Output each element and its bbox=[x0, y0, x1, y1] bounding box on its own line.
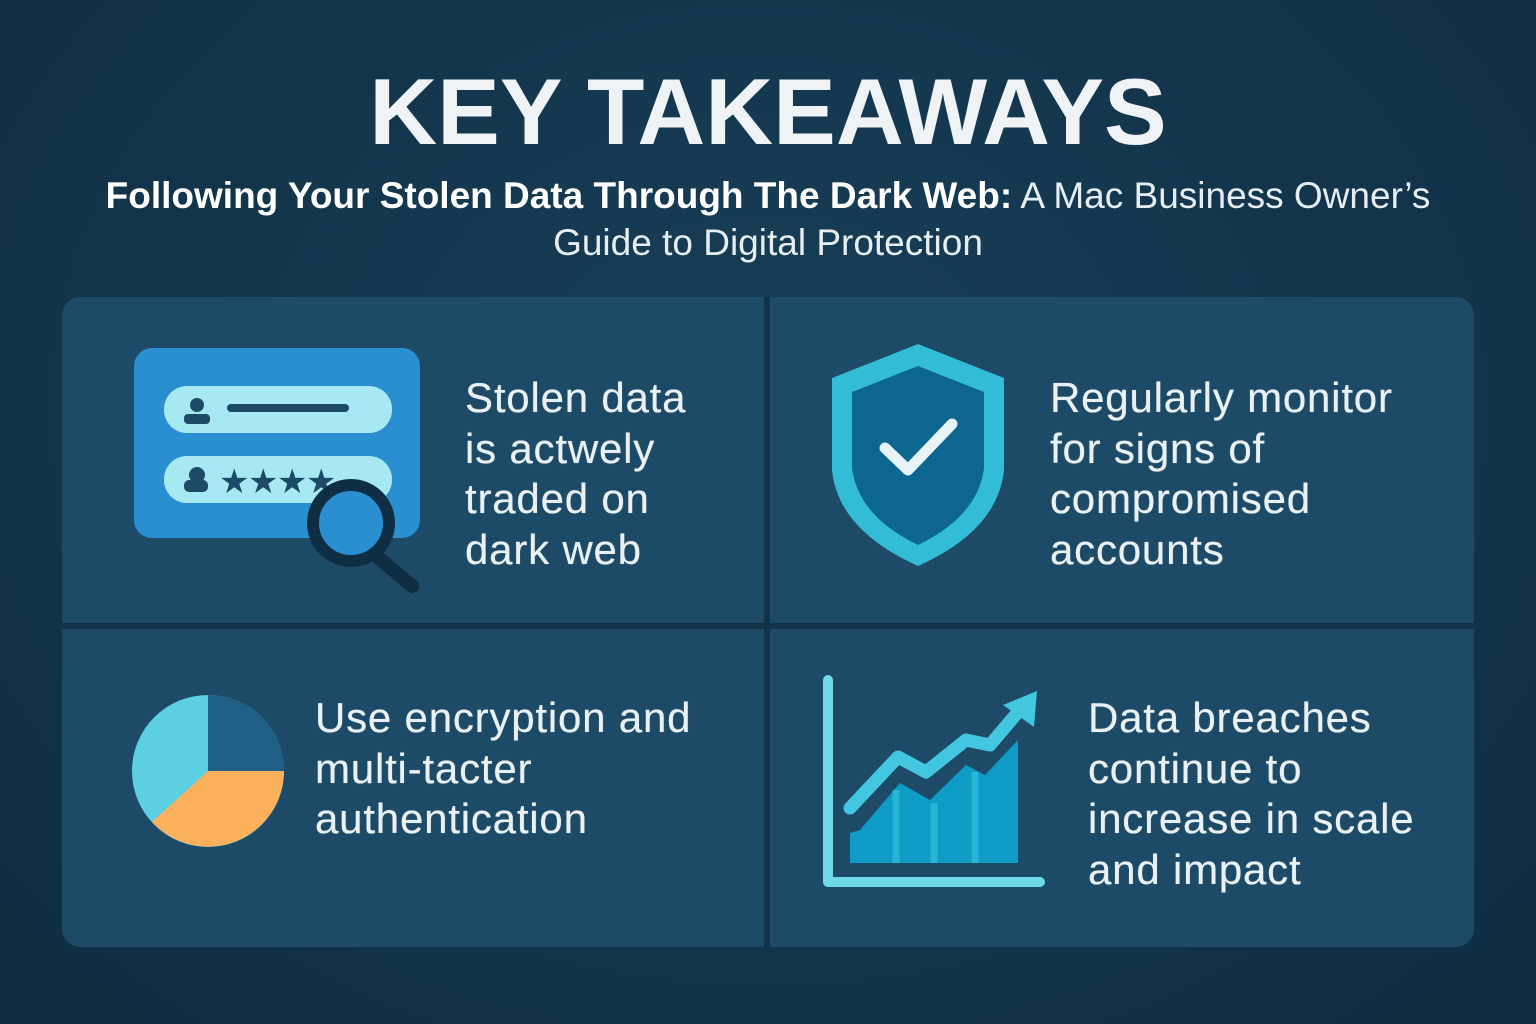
text: encryption: authentication bbox=[315, 795, 588, 842]
icon: profile card with magnifier: ★ bbox=[306, 462, 336, 502]
text: monitor bbox=[1050, 374, 1393, 572]
icon: pie chart bbox=[132, 695, 284, 847]
text: encryption: multi-tacter bbox=[315, 744, 532, 792]
text: monitor: accounts bbox=[1050, 526, 1225, 572]
text: monitor: Regularly monitor bbox=[1050, 374, 1393, 421]
subtitle: Following Your Stolen Data Through The Dark Web: A Mac Business Owner’s bbox=[106, 175, 1430, 216]
panel: monitor bbox=[770, 297, 1474, 623]
text: stolen data bbox=[465, 374, 686, 572]
icon: growth chart bbox=[823, 675, 1045, 887]
icon: profile card with magnifier: ★ bbox=[248, 462, 278, 502]
text: breaches: Data breaches bbox=[1088, 694, 1372, 741]
text: stolen data: dark web bbox=[465, 526, 642, 572]
icon: shield bbox=[832, 344, 1004, 566]
icon: profile card with magnifier bbox=[134, 348, 420, 593]
panels container bbox=[62, 297, 1474, 947]
text: encryption: Use encryption and bbox=[315, 694, 691, 741]
text: encryption bbox=[315, 694, 691, 842]
text: breaches bbox=[1088, 694, 1414, 893]
text: breaches: and impact bbox=[1088, 846, 1301, 892]
panel: breaches bbox=[770, 629, 1474, 947]
panel: stolen data bbox=[62, 297, 764, 623]
title: KEY TAKEAWAYS bbox=[369, 59, 1167, 164]
subtitle: Guide to Digital Protection bbox=[553, 222, 983, 263]
icon: profile card with magnifier: ★ bbox=[219, 462, 249, 502]
panel: encryption bbox=[62, 629, 764, 947]
text: stolen data: Stolen data bbox=[465, 374, 686, 421]
text: stolen data: traded on bbox=[465, 475, 650, 522]
subtitle bbox=[106, 175, 1430, 263]
text: breaches: continue to bbox=[1088, 744, 1302, 792]
text: monitor: for signs of bbox=[1050, 424, 1265, 472]
text: monitor: compromised bbox=[1050, 475, 1311, 522]
text: stolen data: is actwely bbox=[465, 424, 655, 472]
icon: profile card with magnifier: ★ bbox=[277, 462, 307, 502]
text: breaches: increase in scale bbox=[1088, 795, 1414, 842]
